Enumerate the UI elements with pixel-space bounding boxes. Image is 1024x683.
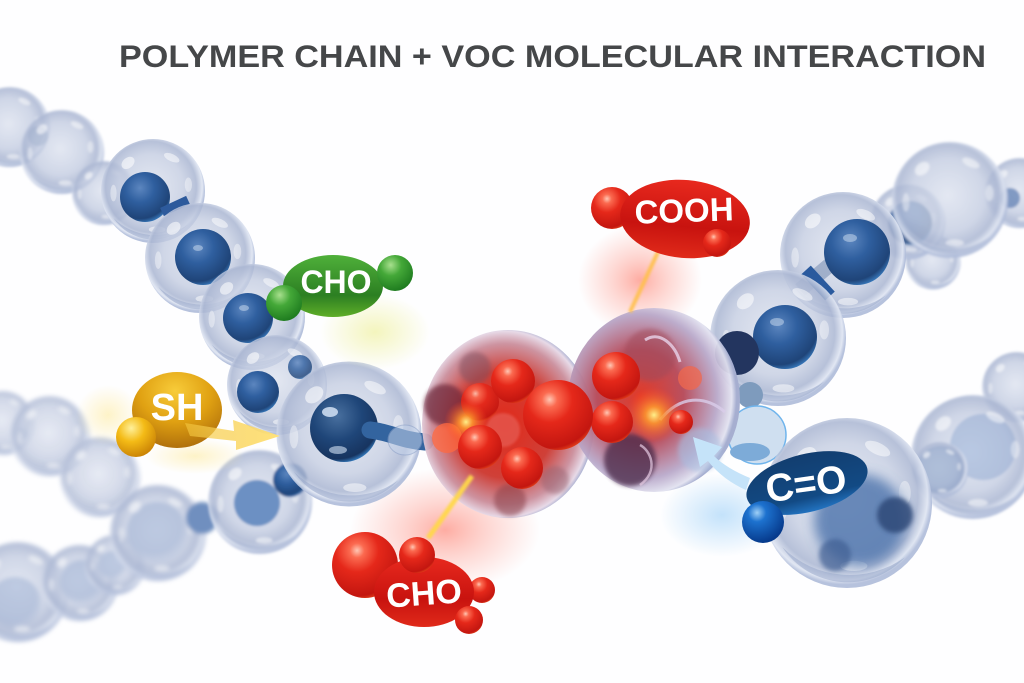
bead with blue atom bbox=[208, 450, 312, 554]
label: C=O bbox=[763, 458, 849, 511]
haze: COOH energy bbox=[578, 225, 702, 335]
far beads bbox=[0, 87, 136, 225]
far beads bbox=[870, 142, 1024, 290]
red atom: central large sphere bbox=[523, 380, 593, 450]
polymer chain: upper left strand bbox=[0, 87, 327, 435]
bead with blue atom bbox=[710, 270, 846, 408]
reaction core: left red sphere bbox=[422, 330, 594, 518]
polymer chain: upper right strand bbox=[710, 142, 1024, 408]
label: CHO bbox=[385, 572, 463, 616]
glow: blue haze near C=O bbox=[660, 473, 784, 557]
bead with blue atom bbox=[199, 264, 305, 370]
bead with blue atom bbox=[780, 192, 906, 318]
VOC molecule: C=O bbox=[740, 440, 874, 543]
bead with blue atom bbox=[145, 203, 255, 313]
polymer chain: middle left strand bbox=[0, 391, 140, 517]
bead with blue atom bbox=[101, 139, 205, 243]
arrow: C=O to core bbox=[693, 437, 750, 490]
label: SH bbox=[151, 387, 203, 429]
reaction core: right red sphere bbox=[568, 308, 740, 492]
VOC molecule: lower CHO bbox=[332, 532, 495, 634]
arrow: SH to polymer bbox=[185, 420, 280, 450]
bright blue bead bbox=[728, 406, 786, 464]
energy beam: COOH to core bbox=[630, 252, 658, 312]
red atoms bbox=[591, 352, 693, 443]
bead with blue atom bbox=[227, 335, 327, 435]
haze: lower CHO energy bbox=[350, 468, 540, 592]
main glass sphere with blue atom bbox=[276, 362, 425, 506]
VOC molecule: green CHO bbox=[266, 255, 413, 321]
VOC molecule: COOH bbox=[591, 174, 753, 264]
energy beam: lower CHO to core bbox=[428, 476, 472, 538]
polymer chain: lower right strand bbox=[728, 352, 1024, 588]
VOC molecule: SH bbox=[76, 372, 280, 474]
polymer chain: lower left strand bbox=[0, 450, 312, 642]
label: COOH bbox=[634, 190, 734, 231]
title: POLYMER CHAIN + VOC MOLECULAR INTERACTION bbox=[119, 38, 986, 74]
red atoms bbox=[458, 359, 543, 489]
glow: green CHO haze bbox=[320, 294, 430, 370]
label: CHO bbox=[300, 264, 372, 300]
large bead bbox=[762, 418, 932, 588]
